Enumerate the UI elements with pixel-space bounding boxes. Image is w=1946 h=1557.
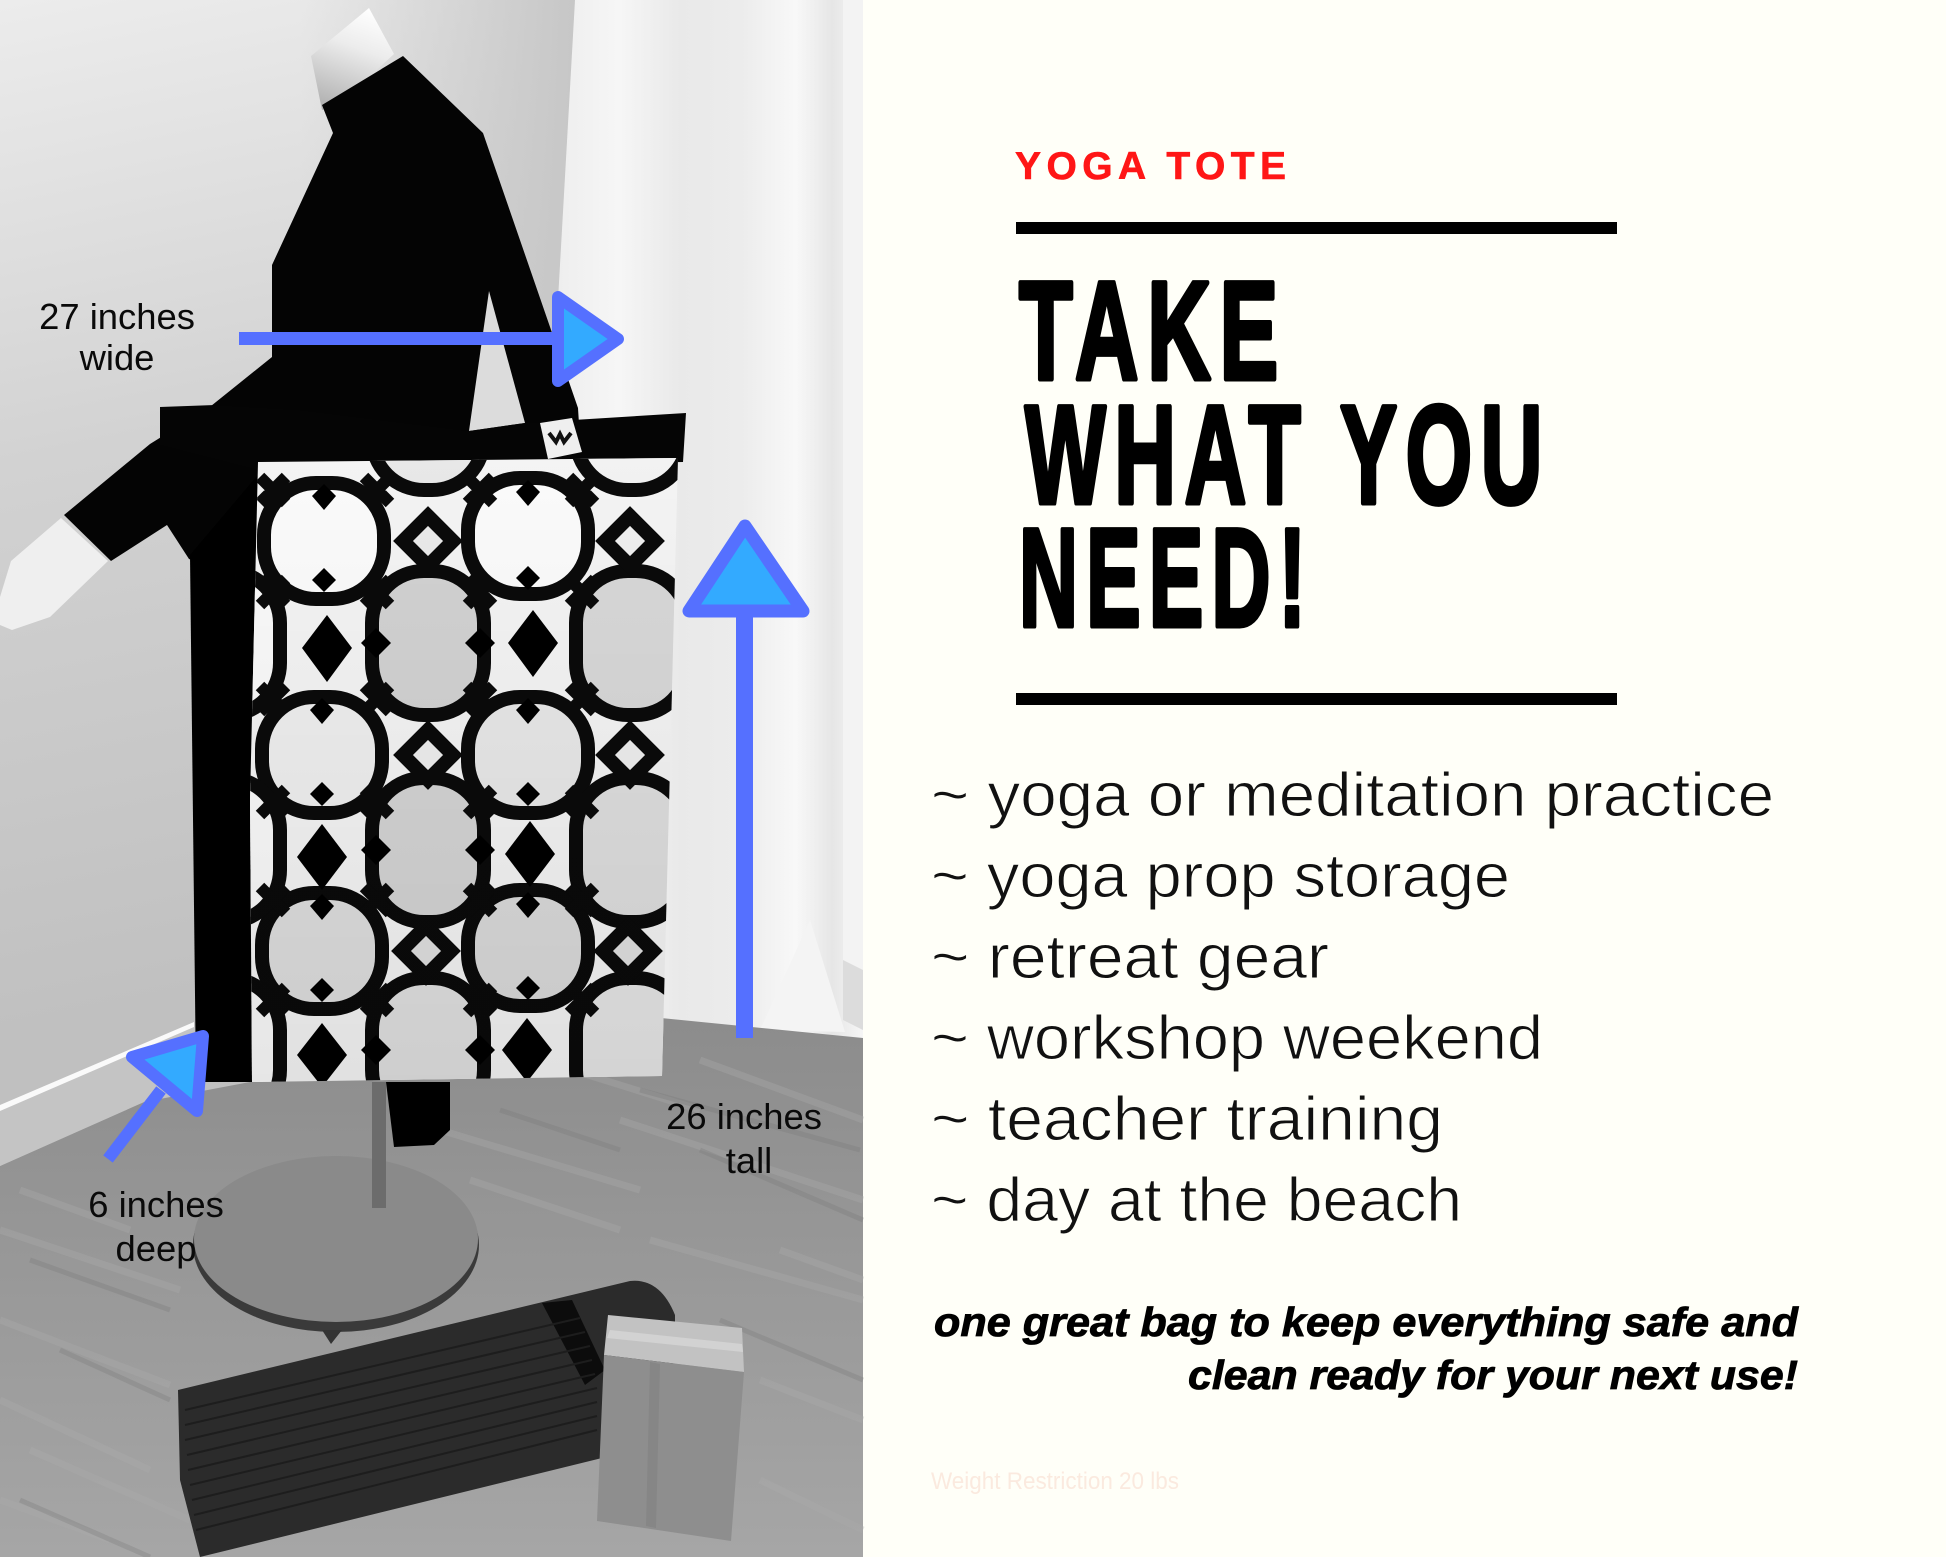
mannequin leg (386, 1082, 450, 1147)
mannequin hand (0, 518, 108, 630)
headline: WHAT YOU (1025, 376, 1551, 533)
headline: NEED! (1019, 499, 1314, 656)
arrow: width (239, 297, 618, 381)
label: 26 inches tall: 26 inches (666, 1096, 822, 1137)
curtain (558, 0, 863, 1040)
uses list: ~ retreat gear (931, 923, 1329, 992)
stand: base disk (193, 1156, 479, 1344)
uses list (931, 761, 1774, 1235)
mannequin black top (64, 56, 580, 600)
arrow: depth (108, 1036, 203, 1159)
tote top band (160, 405, 686, 470)
arrow: height (689, 526, 803, 1038)
uses list: ~ teacher training (931, 1085, 1443, 1154)
floor (0, 1018, 863, 1557)
label: 27 inches wide: wide (79, 337, 154, 378)
weight note: Weight Restriction 20 lbs (931, 1468, 1179, 1495)
mannequin neck (311, 8, 394, 110)
tote patterned face (250, 458, 678, 1082)
eyebrow: YOGA TOTE: YOGA TOTE (1015, 145, 1286, 188)
photo: mannequin with yoga tote (0, 0, 863, 1557)
label: 6 inches deep: 6 inches (88, 1184, 224, 1225)
tagline: clean ready for your next use! (1188, 1352, 1798, 1398)
label: 27 inches wide: 27 inches (39, 296, 195, 337)
tote side panel (190, 470, 262, 1082)
uses list: ~ workshop weekend (931, 1004, 1543, 1073)
label: 26 inches tall: tall (726, 1140, 772, 1181)
yoga block (597, 1315, 744, 1541)
rule top (1016, 222, 1617, 234)
lattice crossings (260, 477, 595, 1013)
tagline (934, 1299, 1799, 1398)
stand: pole (372, 1082, 386, 1208)
headline: TAKE (1019, 252, 1287, 409)
uses list: ~ yoga prop storage (931, 842, 1510, 911)
uses list: ~ yoga or meditation practice (931, 761, 1774, 830)
uses list: ~ day at the beach (931, 1166, 1462, 1235)
baseboard (0, 1022, 194, 1166)
yoga mat (178, 1281, 675, 1557)
rule bottom (1016, 693, 1617, 705)
tagline: one great bag to keep everything safe and (934, 1299, 1799, 1345)
label: 6 inches deep: deep (116, 1228, 196, 1269)
tote strap gap (469, 291, 525, 431)
headline (1019, 252, 1551, 656)
